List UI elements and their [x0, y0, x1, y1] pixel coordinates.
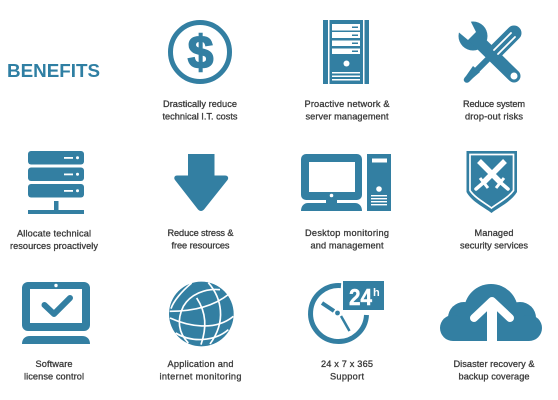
label: disaster recovery: Disaster recovery &: [454, 359, 534, 369]
icon: clock with 24h badge: [311, 281, 384, 341]
item: system risks: [450, 12, 525, 122]
label: allocate resources: Allocate technical: [17, 228, 91, 238]
label: internet monitoring: internet monitoring: [160, 372, 242, 382]
label: security services: Managed: [474, 228, 514, 238]
label: license control: license control: [24, 372, 84, 382]
label: desktop monitoring: Desktop monitoring: [305, 228, 389, 238]
icon: down arrow: [174, 154, 228, 211]
label: system risks: drop-out risks: [465, 112, 523, 122]
label: reduce stress: Reduce stress &: [168, 228, 234, 238]
item: 24x7 support: [311, 281, 384, 382]
label: 24x7 support: Support: [330, 372, 364, 382]
item: reduce costs: [162, 22, 238, 122]
label: network management: server management: [306, 112, 389, 122]
label: network management: Proactive network &: [304, 99, 390, 109]
icon: desktop computer: [301, 154, 391, 211]
icon: monitor with check: [22, 282, 90, 344]
item: internet monitoring: [160, 282, 242, 382]
label: desktop monitoring: and management: [310, 240, 384, 250]
icon: server tower: [323, 20, 369, 84]
label: license control: Software: [36, 359, 72, 369]
icon: server stack: [28, 151, 84, 214]
item: desktop monitoring: [301, 154, 391, 250]
label: disaster recovery: backup coverage: [458, 372, 530, 382]
icon: shield with swords: [466, 151, 517, 213]
icon: cloud with upload arrow: [440, 284, 542, 341]
item: network management: [304, 20, 390, 122]
icon: clock with 24h badge: 24: [349, 284, 372, 310]
icon: globe: [169, 282, 234, 346]
item: disaster recovery: [440, 284, 542, 382]
label: reduce stress: free resources: [172, 240, 230, 250]
item: license control: [22, 282, 90, 382]
item: reduce stress: [168, 154, 234, 250]
label: 24x7 support: 24 x 7 x 365: [321, 359, 373, 369]
item: allocate resources: [10, 151, 98, 251]
label: security services: security services: [460, 240, 528, 250]
icon: clock with 24h badge: h: [373, 287, 380, 299]
icon: wrench and screwdriver: [450, 12, 518, 83]
label: reduce costs: Drastically reduce: [163, 99, 237, 109]
item: security services: [460, 151, 528, 250]
label: system risks: Reduce system: [463, 99, 525, 109]
label: internet monitoring: Application and: [168, 359, 234, 369]
label: allocate resources: resources proactively: [10, 241, 98, 251]
label: reduce costs: technical I.T. costs: [162, 112, 238, 122]
title: BENEFITS: [7, 60, 100, 81]
icon: dollar coin: $: [188, 26, 213, 78]
